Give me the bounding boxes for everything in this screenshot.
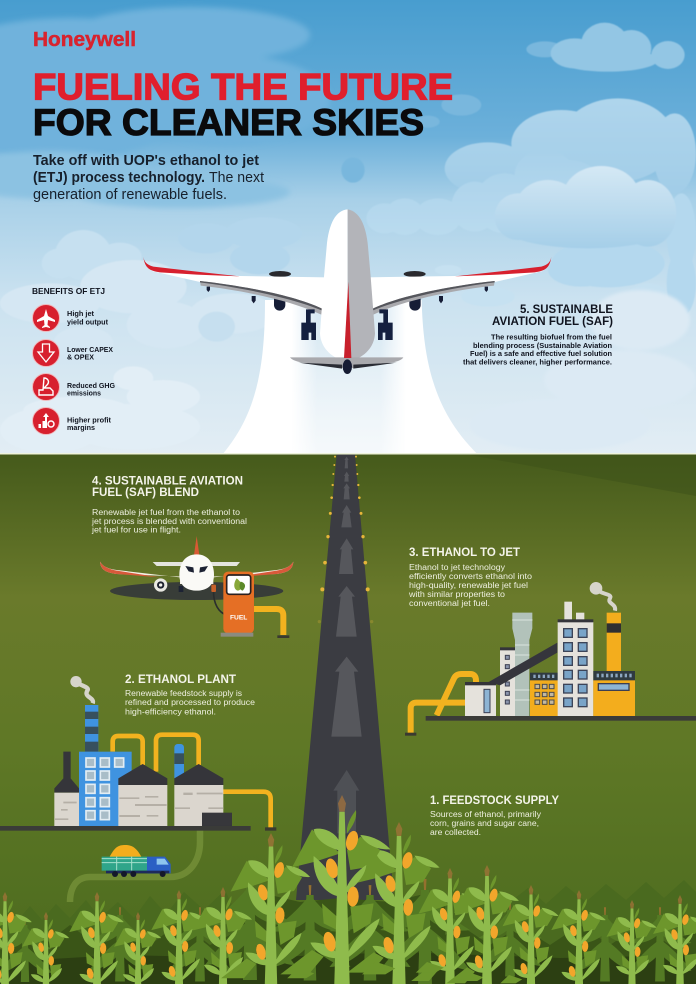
orange chimney (607, 613, 621, 671)
fuel hose (214, 585, 224, 614)
benefit: reduced GHG emissions: Reduced GHG (67, 381, 115, 390)
step 4: SAF blend text (91, 474, 247, 534)
benefit: higher profit margins: Higher profit (67, 416, 111, 424)
benefit: higher profit margins: margins (67, 423, 95, 432)
shed two (174, 764, 232, 826)
step 2: ethanol plant text: high-efficiency ethanol. (125, 708, 216, 716)
benefit: high jet yield output: High jet (67, 309, 94, 318)
left wing (143, 257, 327, 315)
benefit: high jet yield output: yield output (67, 318, 108, 326)
step 3: ethanol to jet text: 3. ETHANOL TO JET (409, 545, 521, 559)
gas tower (512, 613, 532, 716)
step 3: ethanol to jet text: conventional jet fuel. (409, 599, 490, 608)
fuel pipe (254, 609, 283, 635)
benefit: reduced GHG emissions: emissions (67, 388, 101, 398)
subtitle: (ETJ) process technology. (33, 169, 205, 186)
step 1: feedstock supply text: Sources of ethanol, primarily (430, 810, 541, 819)
title (33, 66, 453, 143)
illustration: plane at fuel pump (100, 536, 293, 638)
sky background (0, 0, 696, 454)
refinery pipes (411, 674, 481, 733)
tail cone (343, 359, 352, 374)
step 1: feedstock supply text (430, 793, 559, 837)
ground (0, 454, 696, 984)
step 2: ethanol plant text: 2. ETHANOL PLANT (125, 672, 237, 686)
benefit: lower CAPEX and OPEX: Lower CAPEX (67, 345, 113, 354)
orange building (530, 680, 558, 716)
subtitle: The next (209, 169, 265, 186)
right orange building (593, 680, 635, 716)
benefit: higher profit margins (32, 408, 111, 434)
step 1: feedstock supply text: 1. FEEDSTOCK SUPPLY (430, 793, 559, 807)
illustration: ethanol plant (0, 676, 276, 877)
step 2: ethanol plant text: Renewable feedstock supply is (125, 689, 242, 698)
step 5: sustainable aviation fuel: The resulting biofuel from the fuel (491, 332, 612, 342)
shed one (118, 764, 167, 826)
benefit: high jet yield output (32, 304, 108, 332)
small blue chimney (174, 744, 184, 781)
step 3: ethanol to jet text: efficiently converts ethanol into (409, 572, 533, 581)
truck road (70, 830, 200, 902)
rear engines top (269, 271, 426, 277)
logo: Honeywell: Honeywell (33, 29, 136, 51)
step 5: sustainable aviation fuel: AVIATION FUEL (SAF) (492, 314, 613, 328)
step 2: ethanol plant text (125, 672, 256, 716)
title: FOR CLEANER SKIES (33, 102, 424, 143)
runway arrows (331, 457, 362, 833)
clouds (0, 7, 696, 453)
right wing (368, 257, 551, 315)
step 4: SAF blend text: jet process is blended with conventional (91, 517, 247, 526)
step 5: sustainable aviation fuel: that delivers cleaner, higher performance. (463, 358, 612, 366)
runway lights (318, 456, 373, 623)
ground platform (0, 826, 251, 831)
subtitle (33, 152, 265, 203)
chimney with stripes (85, 705, 98, 752)
step 3: ethanol to jet text: with similar properties to (408, 590, 506, 599)
step 3: ethanol to jet text: Ethanol to jet technology (409, 563, 505, 572)
step 3: ethanol to jet text (408, 545, 533, 608)
fuselage (320, 209, 348, 361)
smoke (76, 682, 93, 703)
panel: benefits of ETJ (32, 286, 115, 434)
ground platform (426, 716, 696, 721)
plane shadow (110, 582, 283, 600)
subtitle: Take off with UOP's ethanol to jet (33, 152, 259, 169)
corn field background foliage (0, 874, 696, 984)
blue building (79, 752, 132, 826)
title: FUELING THE FUTURE (33, 66, 453, 107)
main airplane (143, 209, 551, 374)
conveyor (489, 643, 557, 685)
horizon line (0, 453, 696, 454)
tall building (564, 602, 572, 620)
step 5: sustainable aviation fuel: blending process (Sustainable Aviation (473, 341, 612, 350)
benefits heading: BENEFITS OF ETJ (32, 286, 105, 296)
truck (102, 845, 171, 877)
tailplane (290, 357, 403, 368)
step 1: feedstock supply text: corn, grains and sugar cane, (430, 819, 539, 828)
bottle tower (54, 752, 79, 793)
landing gear (301, 309, 393, 340)
benefit: lower CAPEX and OPEX (32, 340, 113, 366)
step 5: sustainable aviation fuel (463, 302, 613, 366)
step 3: ethanol to jet text: high-quality, renewable jet fuel (409, 581, 528, 590)
red tail fin (344, 282, 351, 358)
step 5: sustainable aviation fuel: 5. SUSTAINABLE (520, 302, 613, 316)
illustration: ethanol to jet refinery (405, 582, 696, 736)
contrails (223, 300, 477, 453)
distant hill (470, 455, 696, 496)
step 5: sustainable aviation fuel: Fuel) is a safe and effective fuel solution (470, 349, 612, 358)
step 4: SAF blend text: 4. SUSTAINABLE AVIATION (92, 474, 243, 488)
step 2: ethanol plant text: refined and processed to produce (125, 698, 256, 707)
corn plants (0, 795, 696, 984)
small plane (100, 536, 293, 592)
fuel pump (211, 572, 254, 637)
step 4: SAF blend text: FUEL (SAF) BLEND (92, 485, 199, 499)
runway (296, 455, 394, 900)
benefit: reduced GHG emissions (32, 374, 115, 400)
smoke (597, 589, 615, 611)
plant pipes (113, 735, 271, 828)
subtitle: generation of renewable fuels. (33, 186, 227, 203)
step 1: feedstock supply text: are collected. (430, 828, 481, 837)
left block (500, 650, 515, 716)
step 4: SAF blend text: jet fuel for use in flight. (91, 526, 181, 534)
step 4: SAF blend text: Renewable jet fuel from the ethanol to (92, 508, 241, 517)
fuel pump: FUEL (230, 614, 247, 621)
benefit: lower CAPEX and OPEX: & OPEX (67, 352, 94, 362)
small building (465, 685, 496, 716)
